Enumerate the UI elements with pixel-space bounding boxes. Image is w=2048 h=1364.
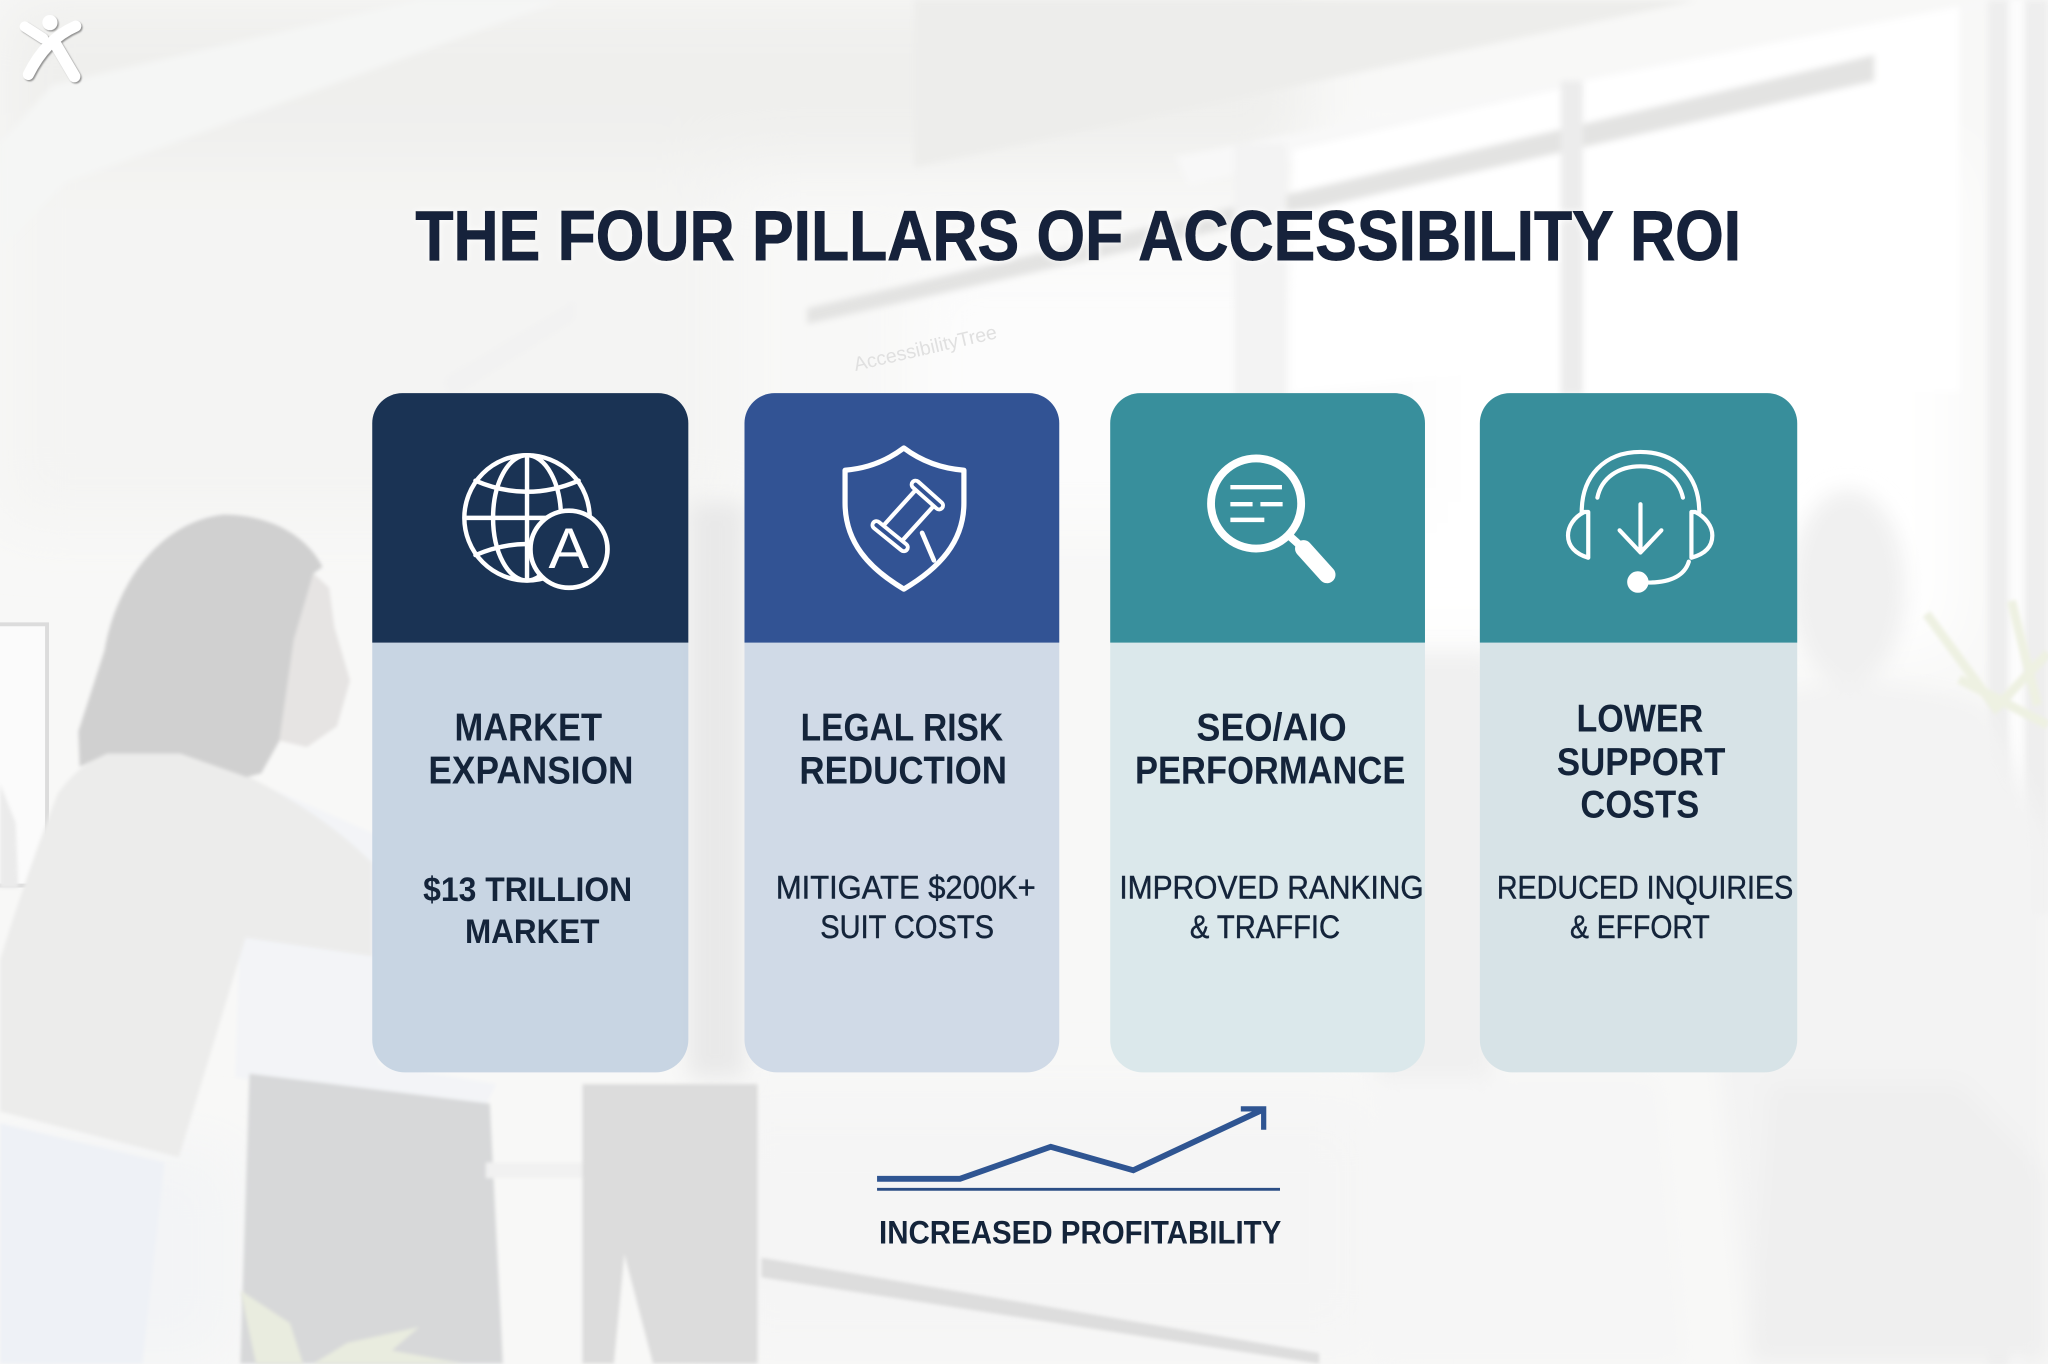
card body — [744, 643, 1059, 1072]
detail text: MARKET — [465, 913, 600, 951]
arrow: rising trend line — [877, 1109, 1264, 1179]
icon: magnifying glass — [1211, 458, 1327, 575]
detail text — [423, 871, 632, 951]
icon: globe with letter A — [464, 455, 607, 588]
title: THE FOUR PILLARS OF ACCESSIBILITY ROI — [415, 196, 1741, 275]
card body — [1480, 643, 1797, 1072]
detail text: SUIT COSTS — [820, 908, 994, 945]
heading: COSTS — [1580, 784, 1699, 827]
background: person's hair — [78, 515, 323, 777]
background: person's shirt — [0, 754, 372, 1157]
detail text: REDUCED INQUIRIES — [1497, 869, 1793, 906]
logo: accessibility person icon — [25, 15, 76, 76]
background: plants — [240, 601, 2048, 1364]
detail text: $13 TRILLION — [423, 871, 632, 909]
detail text: IMPROVED RANKING — [1119, 869, 1424, 906]
card body — [372, 643, 688, 1072]
heading: LOWER — [1576, 697, 1703, 740]
detail text — [1497, 869, 1793, 945]
background: second person's white shirt — [235, 777, 496, 1110]
heading: SEO/AIO — [1196, 707, 1347, 750]
chart: increased profitability trend — [877, 1109, 1282, 1250]
background: faint sign text: AccessibilityTree — [852, 321, 999, 376]
detail text — [776, 869, 1036, 945]
panel: lower support costs — [1480, 393, 1797, 1072]
heading: LEGAL RISK — [801, 707, 1003, 750]
detail text: MITIGATE $200K+ — [776, 869, 1036, 906]
detail text: & TRAFFIC — [1190, 908, 1340, 945]
background: picture frame on left wall — [0, 624, 47, 886]
background: person's face — [280, 573, 350, 747]
card header — [744, 393, 1059, 643]
heading — [428, 707, 633, 793]
heading — [799, 707, 1007, 793]
icon: globe with letter A: A — [549, 517, 590, 581]
background: trousers — [240, 1074, 503, 1364]
heading: PERFORMANCE — [1135, 750, 1405, 793]
card header — [1110, 393, 1425, 643]
card header — [1480, 393, 1797, 643]
heading: MARKET — [455, 707, 602, 750]
heading — [1557, 697, 1725, 827]
card header — [372, 393, 688, 643]
card body — [1110, 643, 1425, 1072]
icon: headset with down arrow — [1568, 452, 1712, 591]
detail text — [1119, 869, 1424, 945]
panel: legal risk reduction — [744, 393, 1059, 1072]
heading: EXPANSION — [428, 750, 633, 793]
detail text: & EFFORT — [1570, 908, 1710, 945]
chart label: INCREASED PROFITABILITY — [879, 1213, 1282, 1250]
panel: market expansion — [372, 393, 688, 1072]
heading: SUPPORT — [1557, 741, 1725, 784]
panel: SEO/AIO performance — [1110, 393, 1425, 1072]
heading: REDUCTION — [799, 750, 1007, 793]
heading — [1135, 707, 1405, 793]
background: railing — [761, 1258, 1319, 1364]
icon: shield with gavel — [845, 448, 964, 589]
baseline — [877, 1188, 1280, 1190]
